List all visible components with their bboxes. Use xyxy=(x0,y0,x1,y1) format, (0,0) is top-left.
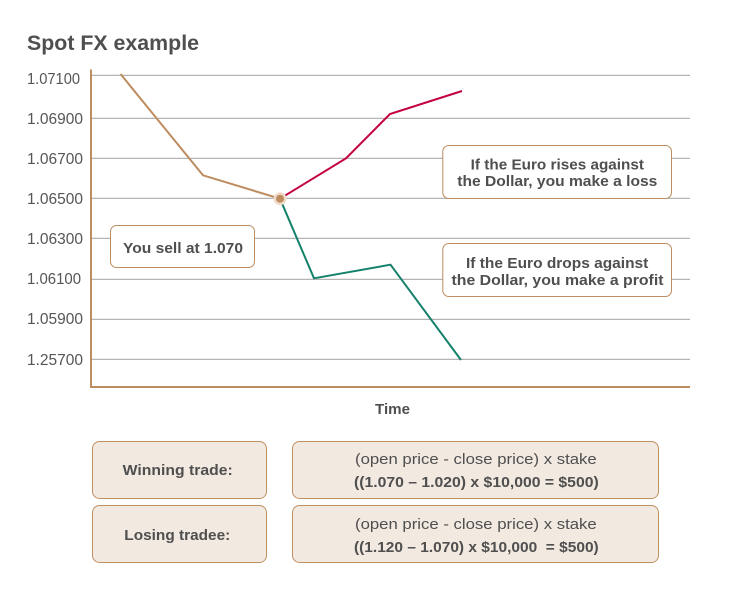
panel: winning trade formula xyxy=(292,442,658,498)
panel: losing trade label: Losing tradee: xyxy=(124,527,230,544)
callout: euro drops: If the Euro drops against xyxy=(466,255,648,272)
callout: euro drops: the Dollar, you make a profit xyxy=(452,272,664,289)
y axis labels: 1.06100 xyxy=(27,271,81,288)
panel: losing trade label xyxy=(92,506,266,562)
callout: euro rises: the Dollar, you make a loss xyxy=(457,173,657,190)
y axis labels: 1.06300 xyxy=(27,231,83,248)
panel: winning trade label: Winning trade: xyxy=(123,462,233,479)
panel: losing trade formula: ((1.120 – 1.070) x $10,000 = $500) xyxy=(354,539,599,556)
y axis labels: 1.06700 xyxy=(27,151,83,168)
callout: euro rises xyxy=(443,146,672,198)
profit line: euro drops xyxy=(280,199,461,360)
panel: winning trade formula: (open price - close price) x stake xyxy=(355,451,597,468)
sell point marker xyxy=(274,192,286,205)
panel: winning trade label xyxy=(92,442,266,498)
axes xyxy=(91,70,690,387)
y axis labels: 1.07100 xyxy=(27,71,80,88)
y axis labels: 1.06500 xyxy=(27,191,83,208)
y axis labels: 1.25700 xyxy=(27,352,83,369)
callout: you sell xyxy=(110,226,254,268)
title: Spot FX example xyxy=(27,32,199,55)
loss line: euro rises xyxy=(280,91,462,199)
price line before sale xyxy=(120,74,280,199)
y axis labels: 1.05900 xyxy=(27,311,83,328)
panel: losing trade formula: (open price - close price) x stake xyxy=(355,516,597,533)
y axis labels xyxy=(27,71,83,369)
panel: winning trade formula: ((1.070 – 1.020) x $10,000 = $500) xyxy=(354,474,599,491)
x axis label: Time xyxy=(375,401,410,418)
callout: euro rises: If the Euro rises against xyxy=(471,156,644,173)
y axis labels: 1.06900 xyxy=(27,111,83,128)
callout: euro drops xyxy=(443,244,672,296)
panel: losing trade formula xyxy=(292,506,658,562)
callout: you sell: You sell at 1.070 xyxy=(123,240,243,257)
chart: spot FX price paths xyxy=(27,70,690,418)
